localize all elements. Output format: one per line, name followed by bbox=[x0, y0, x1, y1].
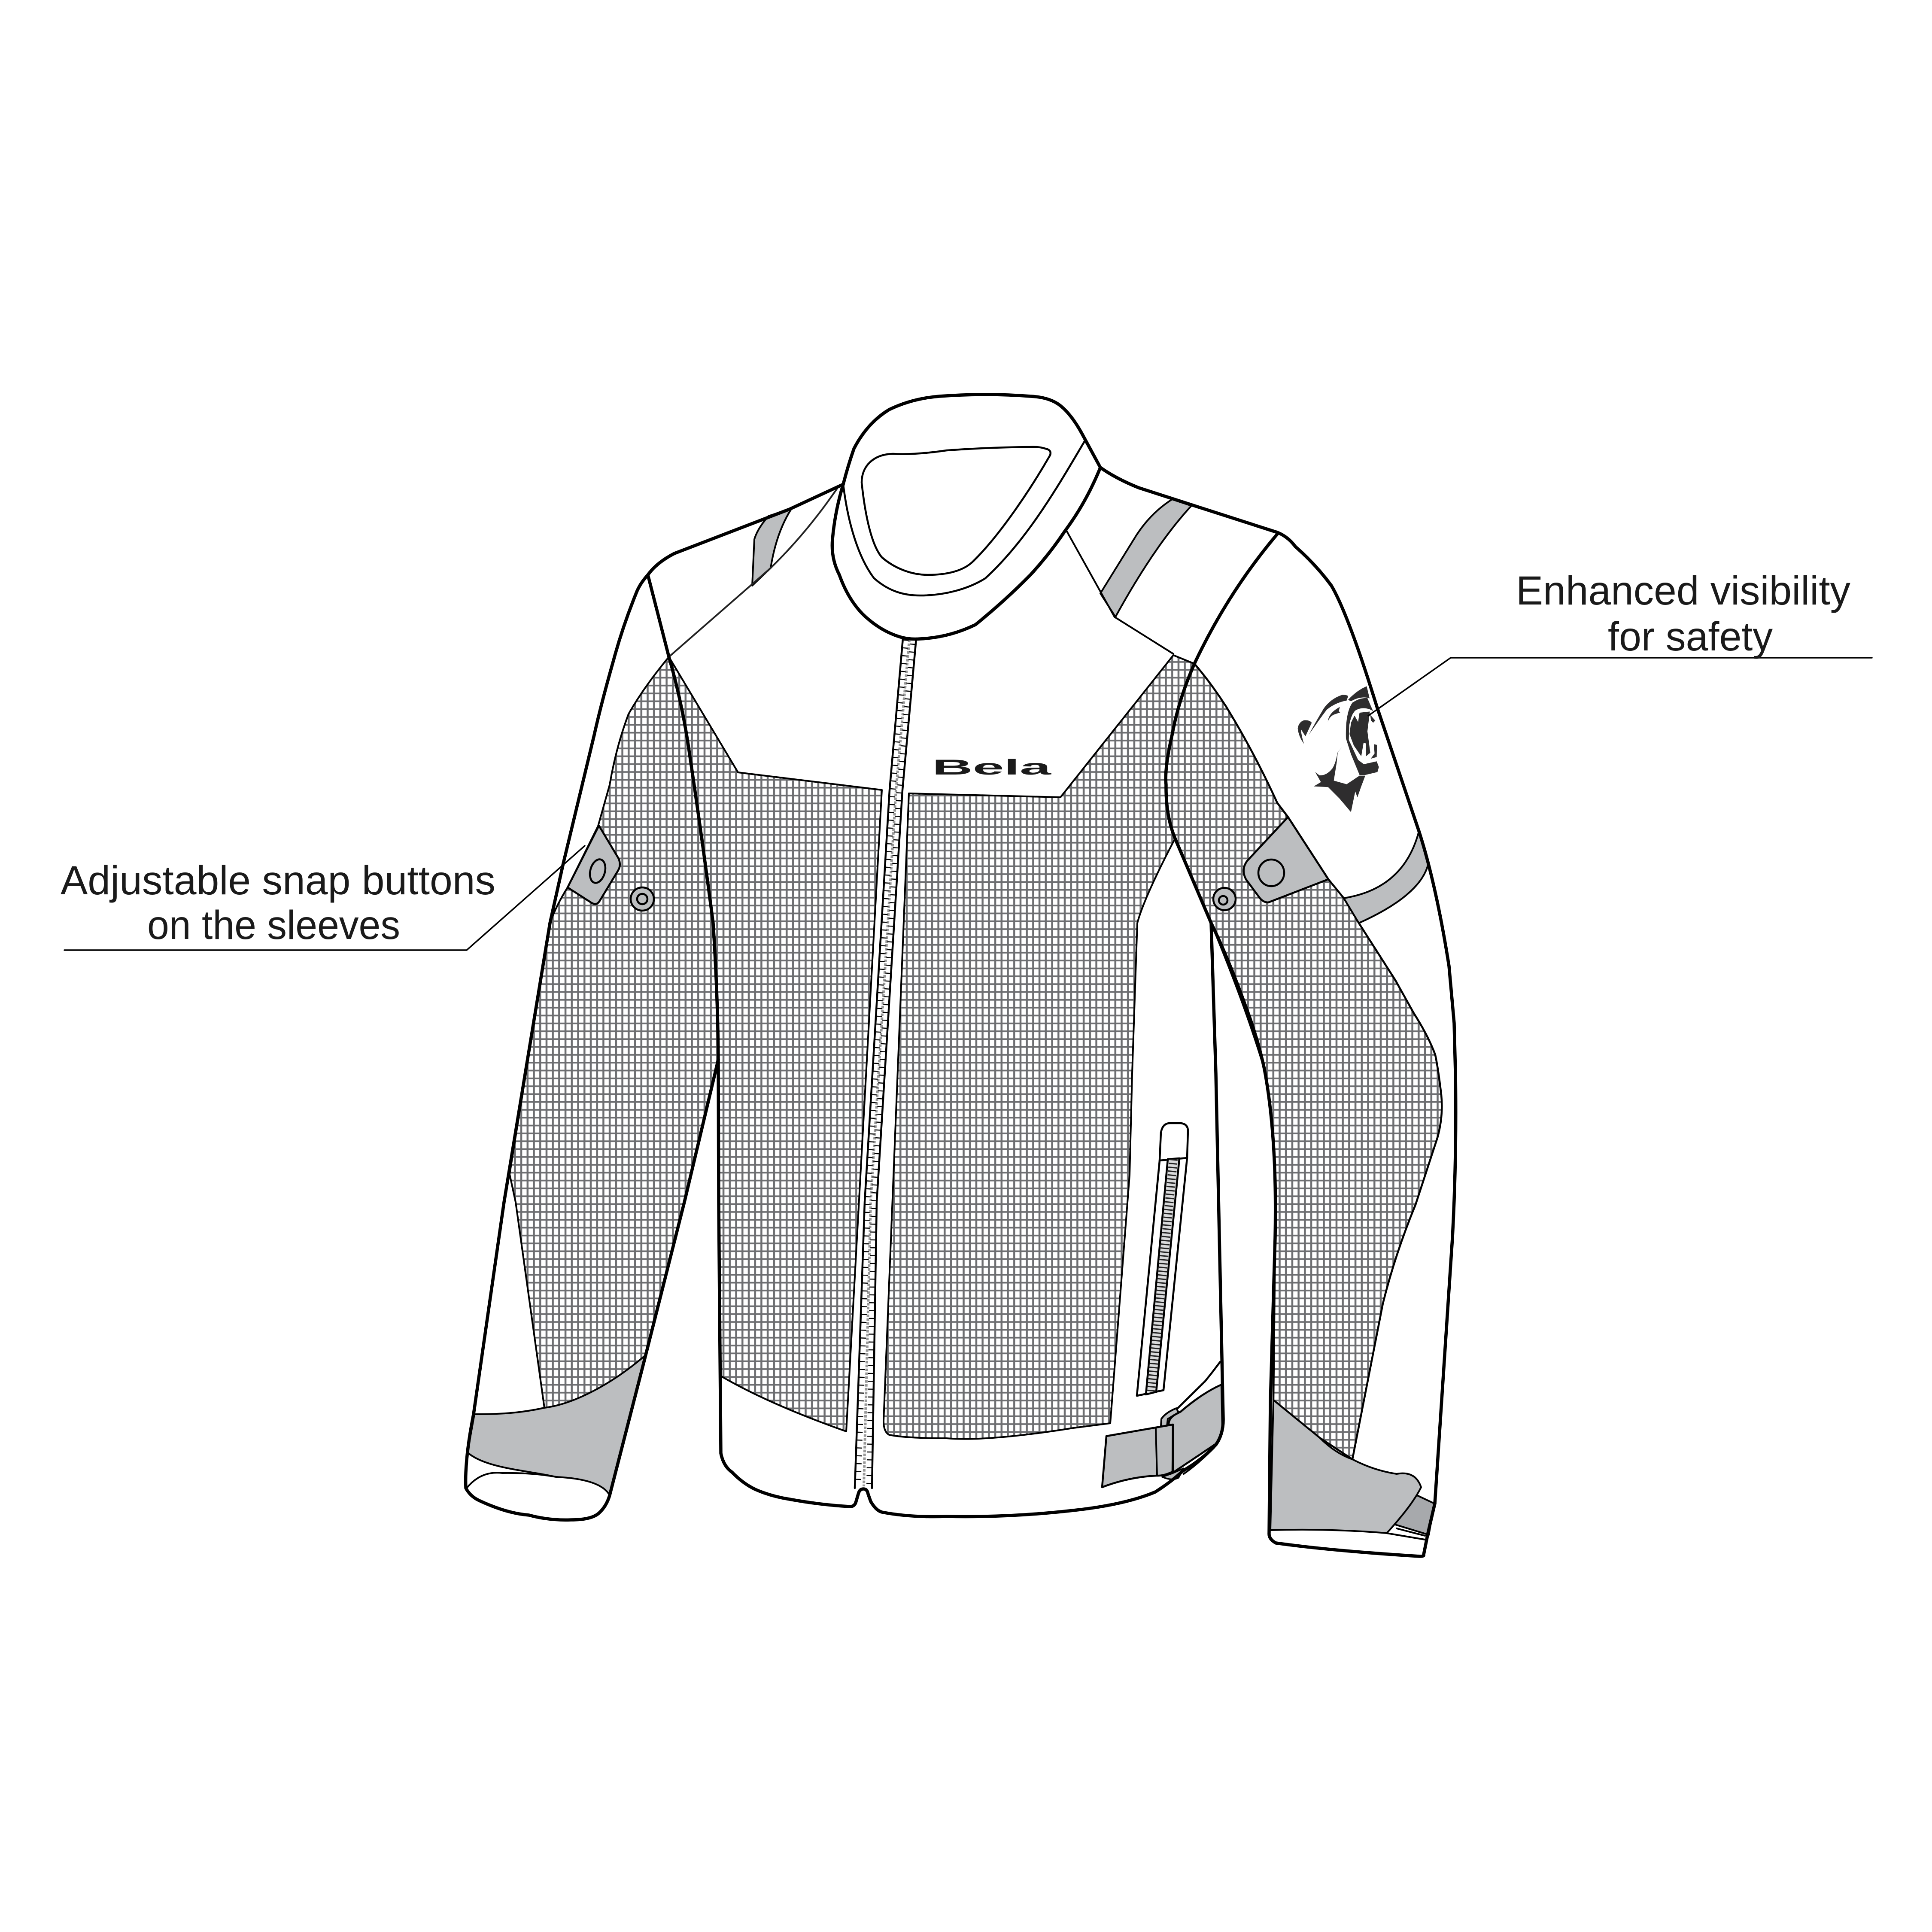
pocket with zipper bbox=[1137, 1123, 1188, 1396]
collar outline bbox=[832, 395, 1100, 639]
panel: left chest mesh bbox=[669, 657, 882, 1431]
left sleeve outer edge bbox=[466, 575, 718, 1520]
right cuff strap bbox=[1391, 1493, 1434, 1535]
left sleeve snap button bbox=[631, 887, 654, 911]
left yoke line bbox=[669, 488, 838, 657]
panel: left sleeve mesh bbox=[510, 657, 718, 1408]
bear snout bbox=[1348, 686, 1370, 701]
right sleeve seam bbox=[1166, 534, 1435, 1556]
shoulder strap left bbox=[752, 508, 792, 586]
velcro waist strap bbox=[1102, 1362, 1222, 1487]
leader line right bbox=[1368, 658, 1872, 716]
bear eye bbox=[1328, 707, 1340, 722]
left cuff opening bbox=[467, 1473, 610, 1520]
bear brow bbox=[1309, 695, 1348, 735]
callout: adjustable snap buttons bbox=[61, 858, 495, 948]
right shoulder and outer sleeve bbox=[1100, 468, 1456, 1504]
bear logo bbox=[1298, 686, 1379, 812]
brand logo: Bela bbox=[932, 755, 1052, 779]
bear mouth bbox=[1349, 711, 1370, 756]
bear upper lip and jaw bbox=[1346, 698, 1379, 775]
collar inner opening bbox=[862, 447, 1051, 575]
bear upper fang bbox=[1370, 715, 1375, 723]
bear neck bbox=[1314, 747, 1365, 812]
sleeve gray band bbox=[1344, 831, 1428, 923]
left cuff gray panel bbox=[468, 1355, 646, 1495]
callout: adjustable snap buttons: Adjustable snap buttons bbox=[61, 858, 495, 903]
shoulder strap right bbox=[1100, 499, 1191, 617]
right cuff inner lines bbox=[1387, 1528, 1425, 1540]
main zipper bbox=[855, 638, 916, 1488]
bear lower fang bbox=[1371, 744, 1377, 759]
right cuff gray panel bbox=[1270, 1400, 1421, 1533]
callout: adjustable snap buttons: on the sleeves bbox=[147, 902, 400, 948]
right yoke line bbox=[1066, 531, 1173, 654]
right sleeve snap tab bbox=[1244, 817, 1328, 902]
right sleeve snap button bbox=[1213, 888, 1236, 910]
left sleeve seam bbox=[648, 575, 718, 1060]
left shoulder bbox=[648, 484, 843, 575]
body hem bbox=[718, 923, 1223, 1517]
left sleeve snap tab bbox=[568, 826, 620, 904]
jacket illustration bbox=[64, 395, 1872, 1556]
callout: enhanced visibility: Enhanced visibility bbox=[1516, 568, 1850, 614]
callout: enhanced visibility bbox=[1516, 568, 1850, 659]
callout: enhanced visibility: for safety bbox=[1608, 614, 1773, 659]
leader line left bbox=[64, 846, 585, 950]
panel: right chest mesh bbox=[884, 655, 1194, 1439]
collar inner ring bbox=[843, 441, 1084, 595]
outline of jacket bbox=[466, 395, 1456, 1556]
panel: right sleeve mesh bbox=[1166, 664, 1442, 1459]
bear ear bbox=[1298, 720, 1312, 744]
